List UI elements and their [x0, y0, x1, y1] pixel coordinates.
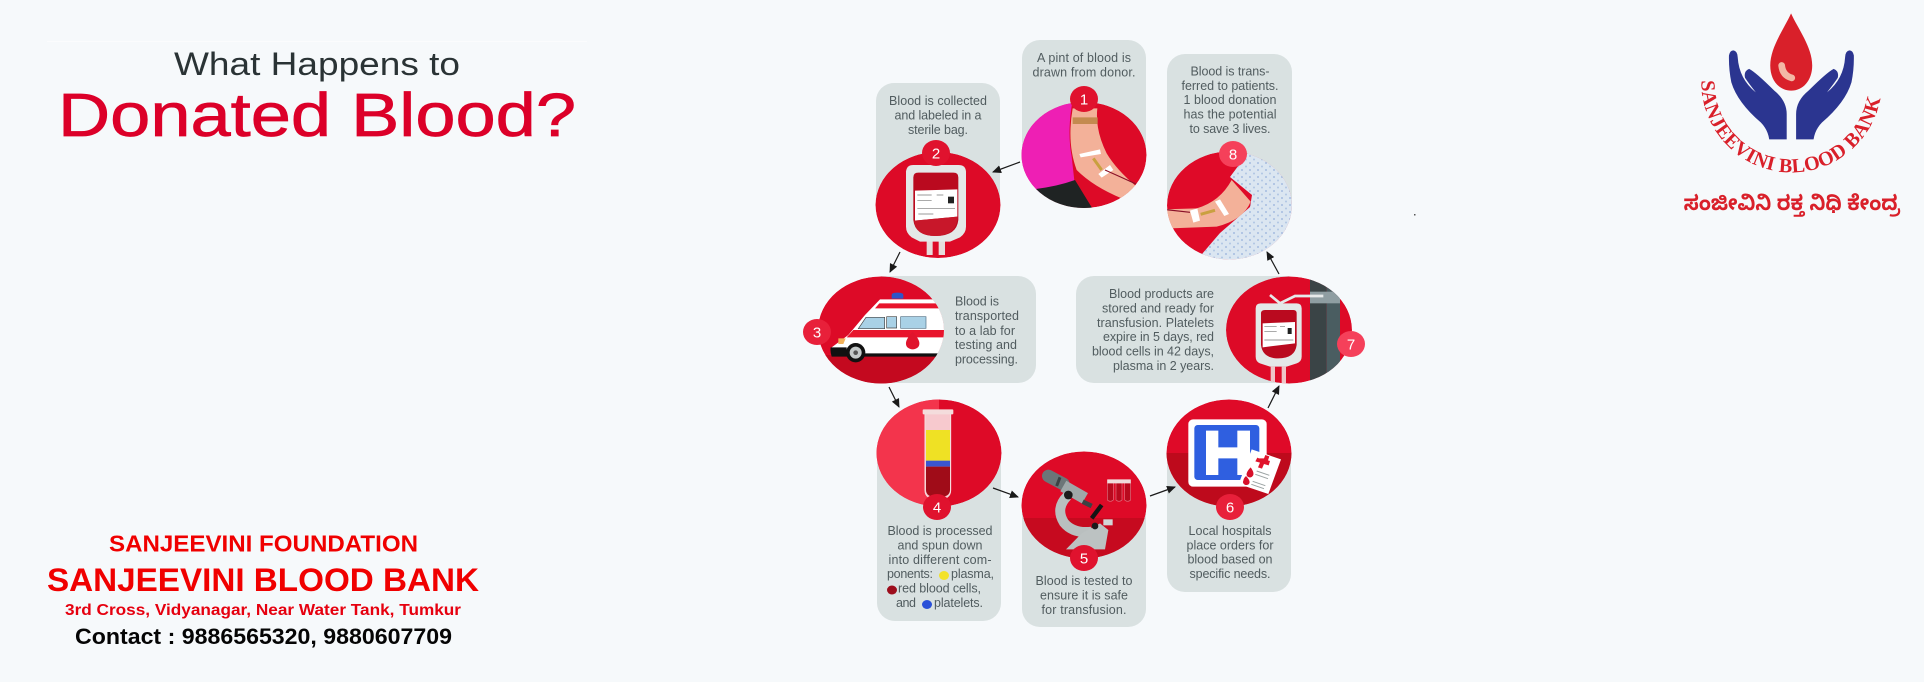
- text: step 4: Blood is processed: [888, 524, 993, 538]
- text: step 7: expire in 5 days, red: [1103, 330, 1214, 344]
- panel: step 1 donor: [1013, 40, 1146, 210]
- badge 3: [803, 319, 831, 345]
- text: step 7: plasma in 2 years.: [1113, 359, 1214, 373]
- badge 2: [922, 140, 950, 166]
- illustration: arm donating blood: [1022, 103, 1146, 208]
- card 6: [1167, 453, 1291, 592]
- badge 8: 8: [1229, 146, 1237, 164]
- logo: Sanjeevini Blood Bank: [1684, 14, 1900, 217]
- text: step 7: transfusion. Platelets: [1097, 316, 1214, 330]
- badge 7: 7: [1347, 336, 1355, 354]
- title: [58, 46, 576, 149]
- panel: step 3 ambulance: [803, 276, 1036, 388]
- contact block: 3rd Cross, Vidyanagar, Near Water Tank, Tumkur: [65, 602, 461, 619]
- illustration: ambulance: [819, 276, 944, 384]
- badge 7: [1337, 331, 1365, 357]
- text: step 1: drawn from donor.: [1032, 66, 1136, 80]
- text: step 6: place orders for: [1186, 538, 1274, 552]
- legend dot: platelets: [922, 600, 932, 609]
- text: step 4: into different com-: [888, 553, 992, 567]
- icon: cupped hands: [1729, 50, 1854, 139]
- text: step 8: to save 3 lives.: [1190, 122, 1270, 136]
- text: step 2: sterile bag.: [908, 123, 968, 137]
- text: step 2: Blood is collected: [889, 94, 987, 108]
- panel: step 8 transfusion: [1167, 54, 1292, 260]
- title: What Happens to: [174, 46, 460, 82]
- text: step 7: stored and ready for: [1102, 302, 1214, 316]
- text: step 5: [1036, 574, 1133, 617]
- badge 6: [1216, 494, 1244, 520]
- text: step 7: Blood products are: [1109, 287, 1214, 301]
- legend dot: plasma: [939, 571, 949, 580]
- text: step 7: [1092, 287, 1214, 373]
- text: step 6: [1186, 524, 1274, 581]
- text: step 5: Blood is tested to: [1036, 574, 1133, 588]
- card 5: [1022, 505, 1146, 627]
- text: step 6: blood based on: [1188, 552, 1273, 566]
- badge 1: 1: [1080, 92, 1088, 108]
- text: step 5: ensure it is safe: [1040, 588, 1128, 602]
- panel: step 2 sterile bag: [876, 83, 1000, 258]
- panel: step 5 microscope: [1022, 452, 1146, 627]
- card 8: [1167, 54, 1292, 205]
- arrows between steps: [889, 162, 1279, 497]
- illustration: test tube: [876, 400, 1002, 506]
- icon: blood drop: [1770, 13, 1812, 91]
- text: step 4: and spun down: [898, 538, 983, 552]
- badge 2: 2: [932, 146, 940, 162]
- illustration: stored blood bag: [1226, 273, 1352, 387]
- card 3: [881, 276, 1036, 383]
- card 4: [877, 453, 1001, 621]
- card 7: [1076, 276, 1289, 383]
- contact block: Contact : 9886565320, 9880607709: [75, 624, 452, 649]
- text: step 4: ponents:: [887, 567, 933, 581]
- text: step 8: 1 blood donation: [1184, 93, 1277, 107]
- badge 4: [923, 494, 951, 520]
- text: step 8: [1182, 64, 1278, 136]
- text: step 4: and: [896, 596, 916, 610]
- title: Donated Blood?: [58, 81, 576, 149]
- contact block: [47, 531, 479, 649]
- badge 5: 5: [1080, 550, 1088, 568]
- text: step 3: to a lab for: [955, 324, 1015, 338]
- text: step 3: [955, 294, 1019, 366]
- illustration: blood bag: [876, 152, 1000, 258]
- text: step 4: red blood cells,: [898, 582, 981, 596]
- badge 3: 3: [813, 324, 821, 342]
- card 2: [876, 83, 1000, 205]
- badge 4: 4: [933, 500, 941, 516]
- text: step 4: [887, 524, 994, 610]
- text: step 6: Local hospitals: [1188, 524, 1272, 538]
- badge 5: [1070, 545, 1098, 571]
- text: step 3: Blood is: [955, 294, 999, 308]
- panel: step 4 centrifuge tube: [870, 395, 1002, 621]
- illustration: hospital sign and order form: [1166, 400, 1292, 506]
- badge 8: [1219, 141, 1247, 167]
- panel: step 6 hospital: [1166, 400, 1292, 592]
- text: step 8: has the potential: [1184, 108, 1276, 122]
- logo Kannada text: ಸಂಜೀವಿನಿ ರಕ್ತ ನಿಧಿ ಕೇಂದ್ರ: [1684, 192, 1900, 217]
- text: step 1: A pint of blood is: [1037, 51, 1131, 65]
- panel: step 7 storage: [1076, 273, 1365, 387]
- illustration: microscope: [1022, 452, 1146, 558]
- text: step 2: and labeled in a: [894, 108, 982, 122]
- text: step 4: platelets.: [934, 596, 983, 610]
- legend dot: red blood cells: [887, 586, 897, 594]
- contact block: SANJEEVINI BLOOD BANK: [47, 562, 479, 598]
- badge 6: 6: [1226, 500, 1234, 516]
- text: step 5: for transfusion.: [1042, 603, 1126, 617]
- card 1: [1022, 40, 1146, 155]
- text: step 8: ferred to patients.: [1182, 79, 1278, 93]
- text: step 1: [1032, 51, 1136, 80]
- illustration: patient arm receiving blood: [1167, 152, 1292, 260]
- text: step 2: [889, 94, 987, 137]
- text: step 3: transported: [955, 309, 1019, 323]
- text: step 7: blood cells in 42 days,: [1092, 344, 1214, 358]
- text: step 3: testing and: [955, 338, 1017, 352]
- text: step 6: specific needs.: [1190, 567, 1270, 581]
- text: step 4: plasma,: [951, 567, 994, 581]
- contact block: SANJEEVINI FOUNDATION: [109, 531, 418, 557]
- logo arc text: SANJEEVINI BLOOD BANK: [1701, 81, 1881, 173]
- badge 1: [1070, 86, 1098, 112]
- text: step 3: processing.: [955, 352, 1018, 366]
- text: step 8: Blood is trans-: [1190, 64, 1270, 78]
